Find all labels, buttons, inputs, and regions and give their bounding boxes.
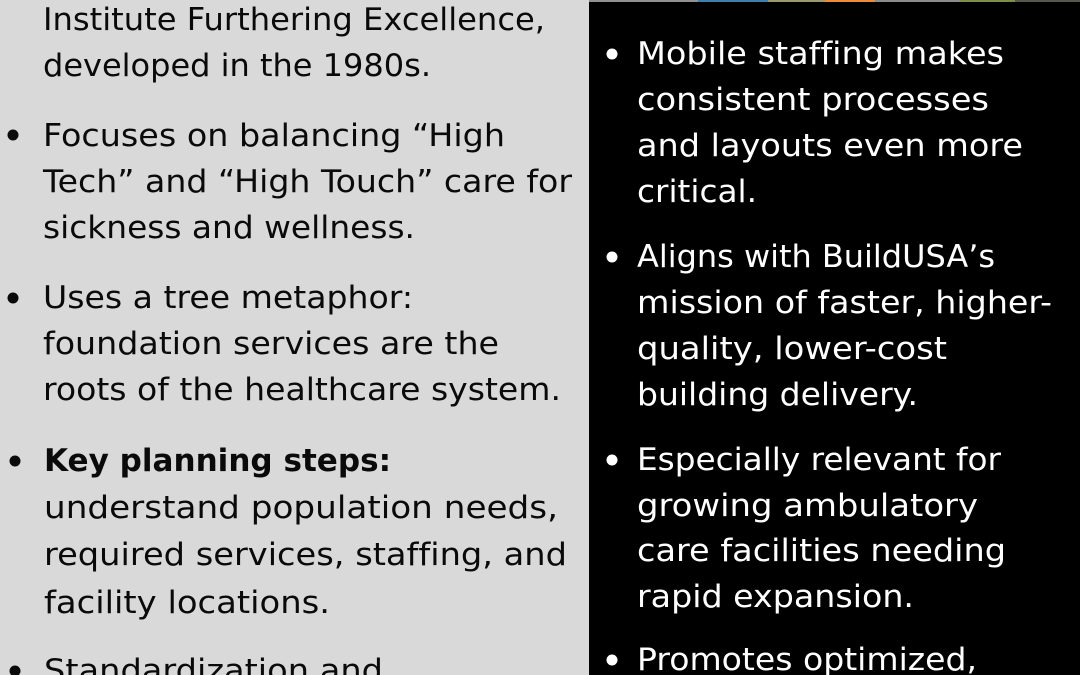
bullet: mobile staffing: critical. xyxy=(637,174,757,210)
bullet: tree metaphor: roots of the healthcare system. xyxy=(43,372,561,408)
bullet: mobile staffing xyxy=(606,36,1023,210)
bullet: ambulatory care: rapid expansion. xyxy=(637,579,914,615)
right column text xyxy=(606,36,1052,675)
text block: institute description xyxy=(43,2,545,84)
left column text xyxy=(8,2,572,675)
top photo strip xyxy=(589,0,1080,2)
bullet: key planning steps xyxy=(10,443,567,621)
bullet: key planning steps: Key planning steps: xyxy=(44,443,391,479)
bullet: tree metaphor: Uses a tree metaphor: xyxy=(43,280,413,316)
bullet: BuildUSA mission xyxy=(606,239,1052,413)
bullet: BuildUSA mission: mission of faster, higher- xyxy=(637,285,1052,321)
bullet: BuildUSA mission: quality, lower-cost xyxy=(637,331,947,367)
bullet: key planning steps: required services, staffing, and xyxy=(44,537,567,573)
panel: left grey background xyxy=(0,0,589,675)
bullet: tree metaphor: foundation services are the xyxy=(43,326,499,362)
text block: institute description: Institute Furthering Excellence, xyxy=(43,2,545,38)
bullet: tree metaphor xyxy=(8,280,561,408)
bullet: key planning steps: facility locations. xyxy=(44,585,330,621)
bullet: high tech and high touch xyxy=(8,118,572,246)
bullet: high tech and high touch: Focuses on balancing “High xyxy=(43,118,505,154)
bullet: ambulatory care: care facilities needing xyxy=(637,533,1006,569)
bullet: ambulatory care: growing ambulatory xyxy=(637,488,978,524)
bullet: ambulatory care xyxy=(606,442,1006,615)
panel: right black background xyxy=(589,0,1080,675)
bullet: key planning steps: understand population needs, xyxy=(44,490,558,526)
bullet: mobile staffing: and layouts even more xyxy=(637,128,1023,164)
bullet: mobile staffing: consistent processes xyxy=(637,82,989,118)
bullet: BuildUSA mission: building delivery. xyxy=(637,377,918,413)
bullet: BuildUSA mission: Aligns with BuildUSA’s xyxy=(637,239,995,275)
bullet: high tech and high touch: sickness and wellness. xyxy=(43,210,415,246)
bullet: ambulatory care: Especially relevant for xyxy=(637,442,1001,478)
bullet: mobile staffing: Mobile staffing makes xyxy=(637,36,1004,72)
text block: institute description: developed in the 1980s. xyxy=(43,48,431,84)
bullet: high tech and high touch: Tech” and “High Touch” care for xyxy=(42,164,572,200)
